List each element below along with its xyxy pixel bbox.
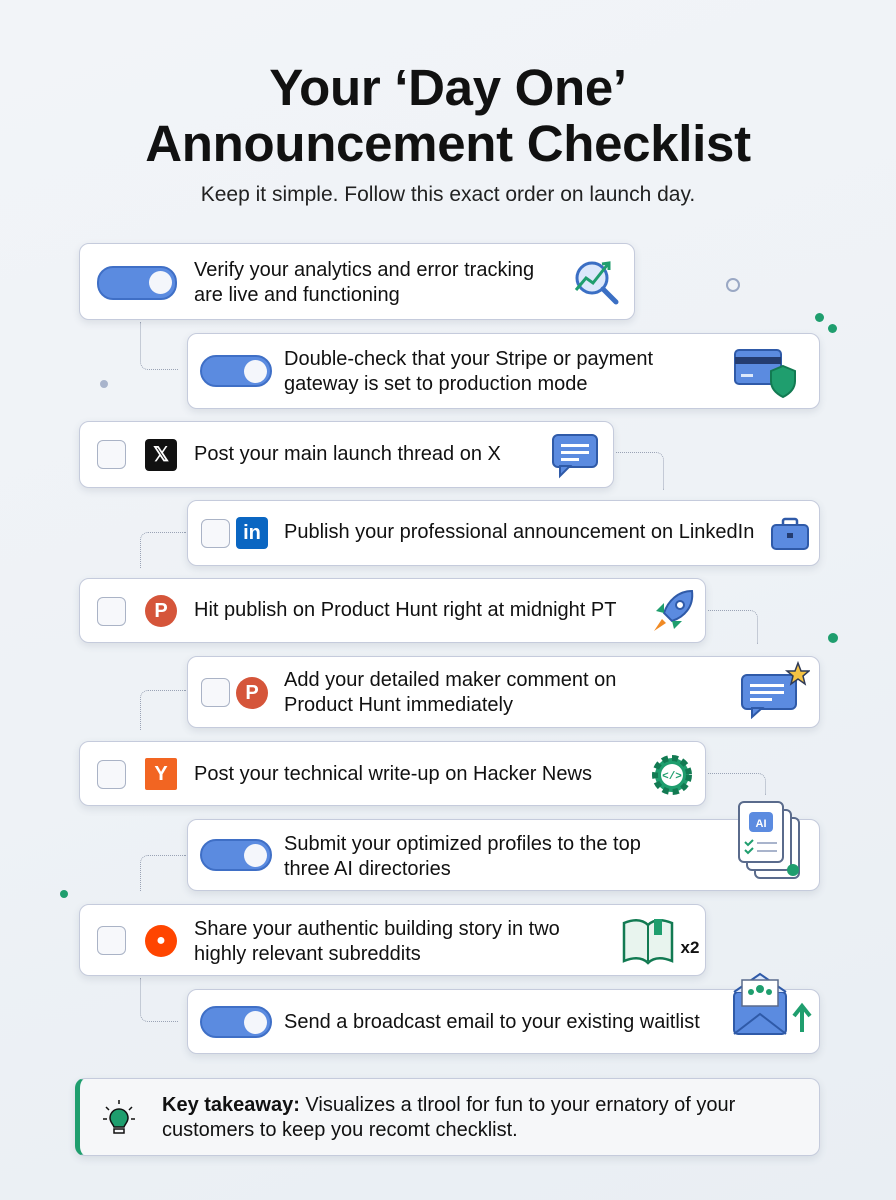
toggle on [200, 1006, 272, 1038]
row 6 [187, 656, 820, 728]
text: are live and functioning [194, 284, 400, 306]
toggle on [97, 266, 177, 300]
text: Verify your analytics and error tracking [194, 259, 534, 281]
text: Add your detailed maker comment on [284, 669, 616, 691]
text: Post your technical write-up on Hacker News [194, 763, 592, 785]
subtitle: Keep it simple. Follow this exact order on launch day. [201, 183, 695, 206]
arrow 1-2 [140, 322, 178, 370]
text [284, 669, 616, 716]
text: Product Hunt immediately [284, 694, 513, 716]
checkbox [97, 597, 126, 626]
arrow 9-10 [140, 978, 178, 1022]
logo: LinkedIn: in [243, 522, 261, 544]
logo: Product Hunt: P [154, 600, 168, 622]
text: Share your authentic building story in two [194, 918, 560, 940]
logo: Reddit [145, 925, 177, 957]
text: gateway is set to production mode [284, 373, 588, 395]
icon: card with shield [734, 349, 796, 398]
row 9 [79, 904, 706, 976]
title: Your ‘Day One’ [269, 59, 627, 116]
logo: Y Combinator: Y [154, 763, 168, 785]
row 4 [187, 500, 820, 566]
arrow 8-9 [140, 855, 186, 891]
checkbox [201, 519, 230, 548]
arrow 5-6 [708, 610, 758, 644]
icon: AI documents [738, 801, 800, 879]
logo: Product Hunt: P [245, 682, 259, 704]
text: customers to keep you recomt checklist. [162, 1119, 518, 1141]
icon: code gear [652, 755, 692, 795]
text [284, 348, 653, 395]
row 1 [79, 243, 635, 320]
row 2 [187, 333, 820, 409]
logo: LinkedIn [236, 517, 268, 549]
row 5 [79, 578, 706, 643]
text [284, 833, 641, 880]
text [194, 918, 560, 965]
text: highly relevant subreddits [194, 943, 421, 965]
logo: Product Hunt [145, 595, 177, 627]
text: Key takeaway: Visualizes a tlrool for fun to your ernatory of your [162, 1094, 735, 1116]
text: three AI directories [284, 858, 451, 880]
text: Submit your optimized profiles to the top [284, 833, 641, 855]
decorative dots [815, 313, 824, 322]
checkbox [97, 760, 126, 789]
icon: AI documents: AI [756, 818, 766, 830]
text [162, 1094, 735, 1141]
checkbox [97, 440, 126, 469]
logo: Y Combinator [145, 758, 177, 790]
arrow 6-7 [140, 690, 186, 730]
icon: code gear: </> [662, 771, 682, 783]
callout: key takeaway [75, 1078, 820, 1156]
icon: chat bubble [552, 434, 598, 478]
text: Send a broadcast email to your existing waitlist [284, 1011, 700, 1033]
row 8 [187, 819, 820, 891]
icon: envelope with people [733, 972, 812, 1035]
text: Post your main launch thread on X [194, 443, 501, 465]
logo: Reddit: ● [156, 932, 166, 949]
icon: briefcase [771, 518, 809, 550]
text: Publish your professional announcement on LinkedIn [284, 521, 754, 543]
title [145, 59, 751, 172]
logo: Product Hunt [236, 677, 268, 709]
icon: book x2 [622, 919, 699, 965]
toggle on [200, 839, 272, 871]
logo: X [145, 439, 177, 471]
icon: book x2: x2 [681, 938, 699, 957]
toggle on [200, 355, 272, 387]
text: Double-check that your Stripe or payment [284, 348, 653, 370]
checkbox [97, 926, 126, 955]
logo: X: 𝕏 [153, 444, 169, 466]
arrow 4-5 [140, 532, 186, 568]
row 10 [187, 989, 820, 1054]
icon: rocket [654, 590, 694, 631]
icon: comment with star [741, 661, 810, 719]
arrow 7-8 [708, 773, 766, 795]
row 7 [79, 741, 706, 806]
title: Announcement Checklist [145, 115, 751, 172]
arrow 3-4 [616, 452, 664, 490]
text: Hit publish on Product Hunt right at midnight PT [194, 599, 616, 621]
icon: lightbulb [103, 1100, 135, 1134]
row 3 [79, 421, 614, 488]
text [194, 259, 534, 306]
checkbox [201, 678, 230, 707]
icon: magnifier chart [574, 261, 618, 304]
